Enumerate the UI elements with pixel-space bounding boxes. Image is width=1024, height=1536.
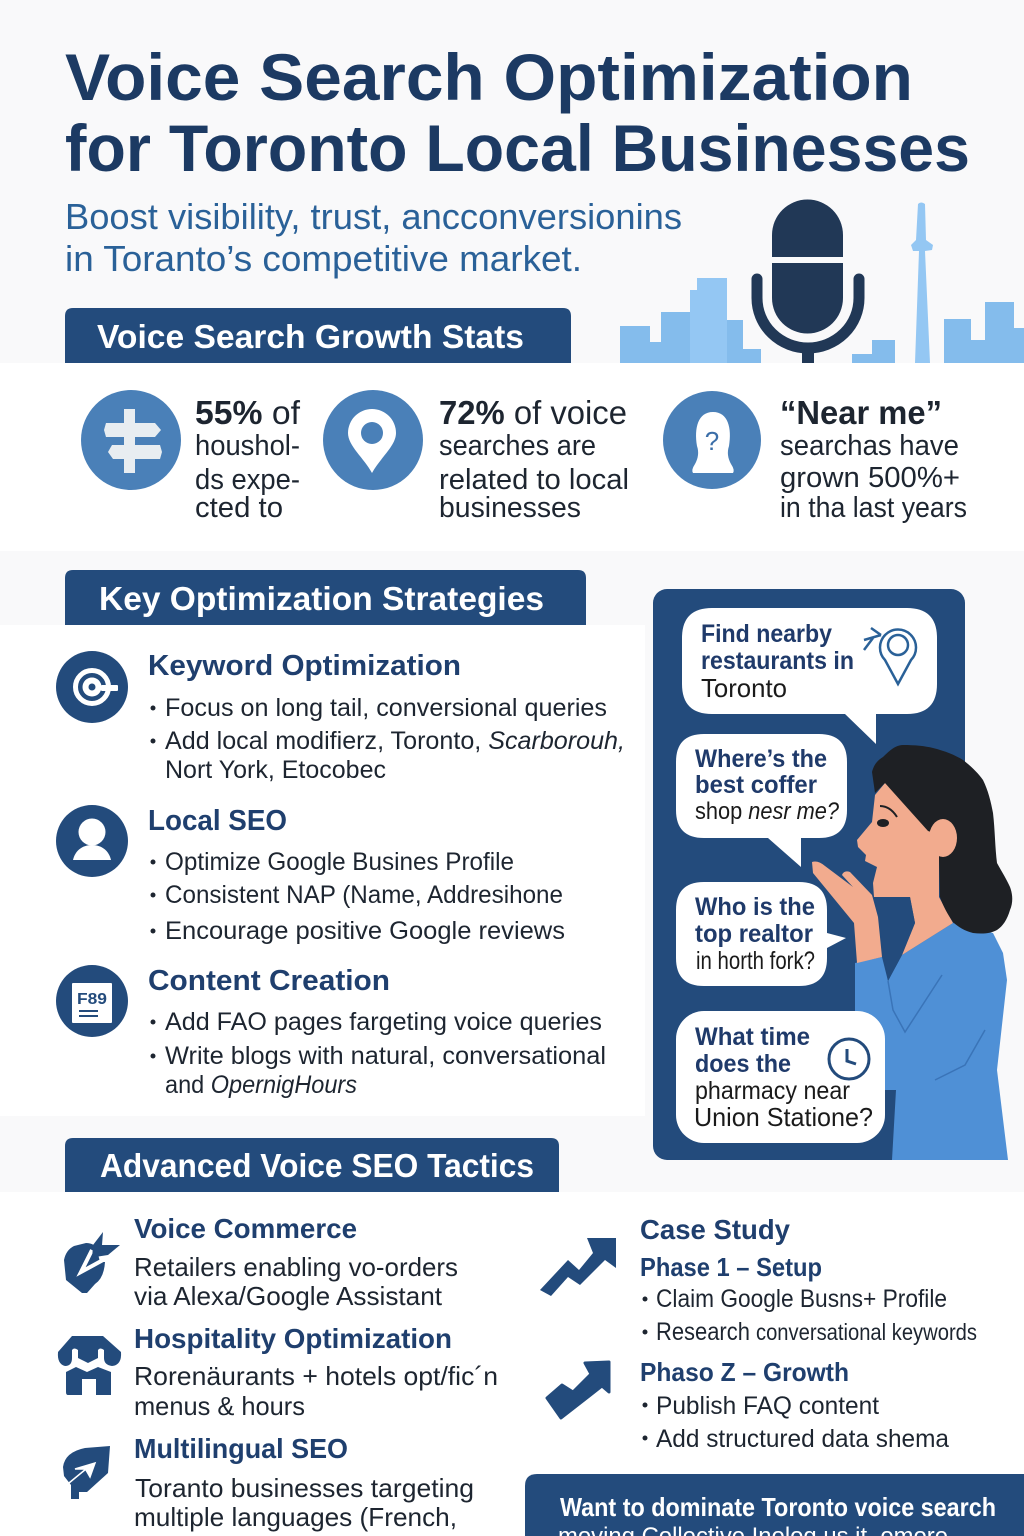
title: for Toronto Local Businesses [65,111,970,185]
stat: near me searches [663,391,967,524]
icon: question head [663,391,761,489]
strategy: content creation: Write blogs with natural, conversational [165,1042,606,1070]
icon: FAQ page: F89 [77,991,107,1008]
stat: near me searches: “Near me” [780,394,942,431]
case study: phase 2 [547,1357,949,1453]
title [65,40,970,185]
speech bubble: restaurants: Find nearby [701,620,832,648]
subtitle: Boost visibility, trust, ancconversionins [65,196,682,237]
call to action [525,1474,1024,1536]
stat: 72% of voice searches [323,390,629,524]
stat: 72% of voice searches: 72% of voice [439,394,627,431]
speech bubble: pharmacy: does the [695,1050,791,1078]
tactic: hospitality optimization: Hospitality Optimization [134,1323,452,1354]
section heading: advanced tactics [65,1138,559,1192]
tactic: multilingual SEO: multiple languages (French, [134,1502,457,1532]
strategy: keyword optimization [56,650,625,784]
icon: shield with arrow [64,1232,120,1293]
speech bubble: restaurants: restaurants in [701,647,854,675]
strategy: local SEO: Optimize Google Busines Profile [165,848,514,876]
icon: leaf [63,1446,110,1499]
panel: voice queries with woman [653,589,1012,1160]
strategy: content creation: Content Creation [148,965,390,997]
speech bubble: realtor [676,882,846,986]
case study: phase 1: Claim Google Busns+ Profile [656,1285,947,1313]
stat: near me searches: in tha last years [780,492,967,524]
icon: location pin [323,390,423,490]
tactic: voice commerce: Voice Commerce [134,1213,357,1244]
speech bubble: coffee shop [676,734,847,867]
icon: rounded growth arrow [547,1362,609,1418]
case study: phase 1: Phase 1 – Setup [640,1252,822,1282]
tactic: multilingual SEO: Multilingual SEO [134,1433,348,1464]
icon: target [56,651,128,723]
strategy: local SEO: Encourage positive Google reviews [165,917,565,945]
icon: microphone [757,199,859,363]
speech bubble: realtor: in horth fork? [696,947,815,975]
strategy: keyword optimization: Focus on long tail, conversional queries [165,694,607,722]
icon: growth arrow [540,1238,616,1296]
strategy: local SEO: Consistent NAP (Name, Addresihone [165,881,563,909]
strategy: content creation [56,965,606,1099]
stat: near me searches: searchas have [780,430,959,462]
stat: 55% of households: ds expe- [195,464,300,496]
strategy: local SEO [56,805,565,945]
tactic: voice commerce [64,1213,458,1311]
title: Voice Search Optimization [65,40,913,114]
strategy: keyword optimization: Add local modifierz, Toronto, Scarborouh, [165,727,625,755]
tactic: multilingual SEO: Toranto businesses targeting [135,1473,474,1503]
tactic: voice commerce: via Alexa/Google Assistant [134,1281,443,1311]
speech bubble: realtor: top realtor [695,920,813,948]
icon: storefront [58,1336,121,1395]
stat: 55% of households: 55% of [195,394,301,431]
subtitle: in Toranto’s competitive market. [65,238,582,279]
tactic: voice commerce: Retailers enabling vo-orders [134,1252,458,1282]
stat: 72% of voice searches: businesses [439,492,581,524]
speech bubble: coffee shop: best coffer [695,771,817,799]
speech bubble: coffee shop: Where’s the [695,745,827,773]
stat: near me searches: grown 500%+ [780,462,960,494]
strategy: keyword optimization: Nort York, Etocobec [165,756,386,784]
case study: phase 2: Phaso Z – Growth [640,1357,849,1387]
stat: 72% of voice searches: related to local [439,464,629,496]
speech bubble: pharmacy: What time [695,1023,810,1051]
speech bubble: realtor: Who is the [695,893,815,921]
icon: person [56,805,128,877]
section heading: growth stats [65,308,571,363]
icon: FAQ page [56,965,128,1037]
icon: signpost [81,390,181,490]
tactic: multilingual SEO [63,1433,474,1532]
speech bubble: restaurants: Toronto [701,673,787,703]
icon: question head: ? [705,426,719,456]
stat: 55% of households: cted to [195,492,283,524]
stat: 72% of voice searches: searches are [439,430,596,462]
case study: phase 1: Research conversational keywords [656,1318,977,1346]
subtitle [65,196,682,279]
stat: 55% of households: houshol- [195,430,300,462]
case study: phase 2: Add structured data shema [656,1425,949,1453]
speech bubble: coffee shop: shop nesr me? [695,798,840,825]
section heading: key strategies: Key Optimization Strategies [99,580,544,617]
tactic: hospitality optimization: menus & hours [134,1391,305,1421]
case study: phase 2: Publish FAQ content [656,1392,879,1420]
strategy: content creation: and OpernigHours [165,1071,357,1099]
icon: pin with branch [864,628,916,684]
illustration: woman speaking [812,745,1012,1160]
tactic: hospitality optimization: Rorenäurants + hotels opt/fic´n [134,1361,498,1391]
strategy: keyword optimization: Keyword Optimization [148,650,461,682]
speech bubble: pharmacy: pharmacy near [695,1077,850,1105]
tactic: hospitality optimization [58,1323,498,1421]
illustration: Toronto skyline [620,202,1024,363]
section heading: key strategies [65,570,586,625]
section heading: advanced tactics: Advanced Voice SEO Tactics [100,1147,534,1184]
speech bubble: pharmacy [676,1011,885,1143]
stat: 55% of households [81,390,301,524]
section heading: growth stats: Voice Search Growth Stats [97,318,524,355]
icon: clock [829,1039,869,1079]
case study: phase 1 [540,1214,977,1346]
case study: phase 1: Case Study [640,1214,790,1245]
strategy: content creation: Add FAO pages fargeting voice queries [165,1008,602,1036]
strategy: local SEO: Local SEO [148,805,287,837]
speech bubble: pharmacy: Union Statione? [694,1102,873,1132]
speech bubble: restaurants [682,608,937,744]
